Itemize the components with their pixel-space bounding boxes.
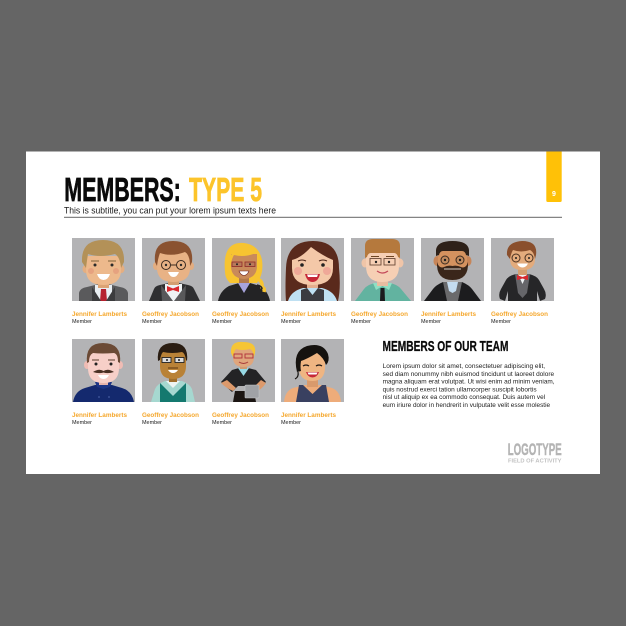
avatar: blonde woman with red glasses <box>218 242 270 301</box>
member card 1 <box>72 238 135 325</box>
member card 9 <box>142 339 205 426</box>
member card 3 <box>212 238 275 325</box>
body text: nisl ut aliquip ex ea commodo consequat. Duis autem vel <box>383 394 545 401</box>
name: Member <box>281 420 301 426</box>
name: Member <box>421 319 441 325</box>
avatar: bearded man with glasses <box>424 241 481 301</box>
member card 11 <box>281 339 344 426</box>
name: Geoffrey Jacobson <box>142 413 199 419</box>
body text: magna aliquam erat volutpat. Ut wisi enim ad minim veniam, <box>383 379 555 386</box>
member card 2 <box>142 238 205 325</box>
panel: white slide <box>26 152 600 474</box>
avatar: man with teal shirt <box>355 239 411 301</box>
page tab: 9 <box>552 191 556 198</box>
member card 7 <box>491 238 554 325</box>
name <box>72 413 128 426</box>
name: Jennifer Lamberts <box>281 312 337 318</box>
body text: eum iriure dolor in hendrerit in vulputate velit esse molestie <box>383 402 551 409</box>
member card 5 <box>351 238 414 325</box>
body text: Lorem ipsum dolor sit amet, consectetuer adipiscing elit, <box>383 363 545 370</box>
name: Member <box>212 319 232 325</box>
name: Jennifer Lamberts <box>72 312 128 318</box>
logotype: LOGOTYPE <box>508 441 562 459</box>
name: Geoffrey Jacobson <box>142 312 199 318</box>
name: Member <box>142 420 162 426</box>
name: Jennifer Lamberts <box>72 413 128 419</box>
name <box>491 312 548 325</box>
name: Member <box>281 319 301 325</box>
avatar: man with teal vest <box>151 343 195 402</box>
avatar: woman with long brown hair <box>286 241 340 301</box>
name: Member <box>142 319 162 325</box>
name: Jennifer Lamberts <box>421 312 477 318</box>
name <box>351 312 408 325</box>
name <box>421 312 477 325</box>
member card 4 <box>281 238 344 325</box>
name <box>72 312 128 325</box>
name <box>212 312 269 325</box>
logotype: FIELD OF ACTIVITY <box>508 459 562 465</box>
avatar: blond man with red tie <box>79 240 128 301</box>
name: Member <box>72 319 92 325</box>
subtitle: This is subtitle, you can put your lorem ipsum texts here <box>64 205 276 215</box>
name: Geoffrey Jacobson <box>212 312 269 318</box>
avatar: woman with black hair and navy dress <box>284 345 341 402</box>
name: Geoffrey Jacobson <box>491 312 548 318</box>
name: Geoffrey Jacobson <box>351 312 408 318</box>
name: Jennifer Lamberts <box>281 413 337 419</box>
name <box>142 312 199 325</box>
avatar: man with moustache and navy coat <box>73 343 134 402</box>
avatar: man with round glasses and bow tie <box>149 241 200 301</box>
page tab <box>546 152 562 202</box>
title: TYPE 5 <box>189 171 262 208</box>
name <box>142 413 199 426</box>
name: Geoffrey Jacobson <box>212 413 269 419</box>
name <box>212 413 269 426</box>
name: Member <box>351 319 371 325</box>
member card 8 <box>72 339 135 426</box>
name <box>281 413 337 426</box>
name: Member <box>491 319 511 325</box>
heading: members of our team: MEMBERS OF OUR TEAM <box>382 338 508 355</box>
name: Member <box>72 420 92 426</box>
body text <box>383 363 555 409</box>
body text: sed diam nonummy nibh euismod tincidunt ut laoreet dolore <box>383 371 555 378</box>
name: Member <box>212 420 232 426</box>
title: MEMBERS: <box>64 171 181 208</box>
avatar: small man with suit and bow tie <box>499 241 546 301</box>
logotype <box>508 441 562 465</box>
body text: quis nostrud exerci tation ullamcorper suscipit lobortis <box>383 386 537 393</box>
name <box>281 312 337 325</box>
member card 6 <box>421 238 484 325</box>
member card 10 <box>212 339 275 426</box>
avatar: blonde woman holding tablet <box>221 342 266 402</box>
